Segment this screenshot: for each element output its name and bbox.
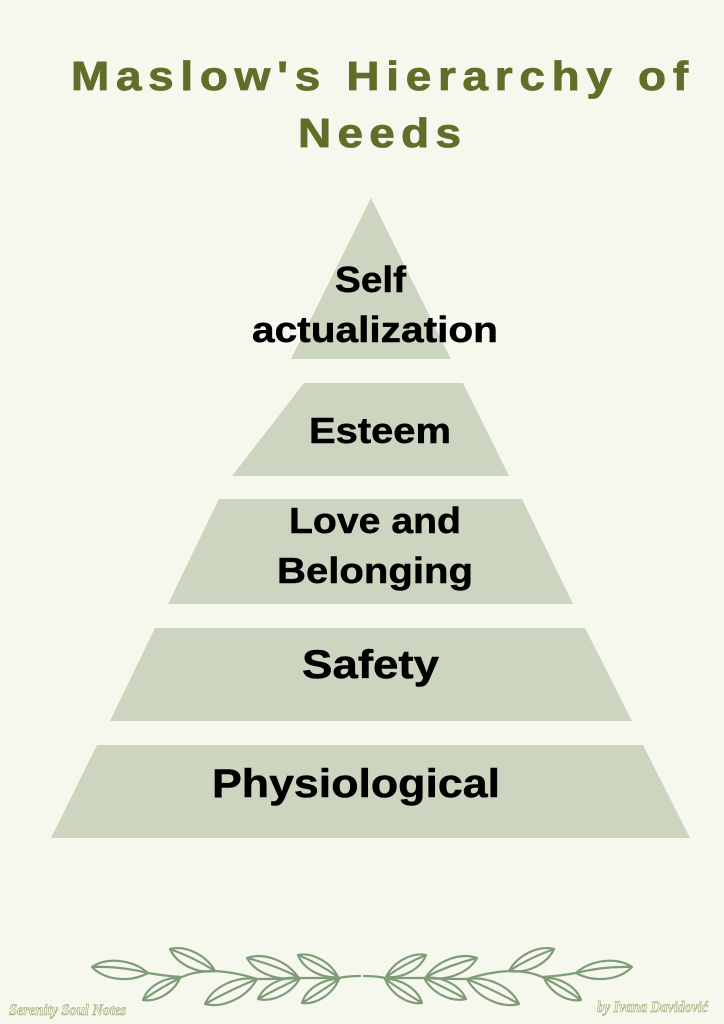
tier: esteem bbox=[232, 383, 509, 476]
icon: right leaf branch bbox=[364, 948, 632, 1005]
tier: safety bbox=[110, 628, 632, 721]
title: Needs bbox=[298, 111, 461, 156]
title bbox=[71, 54, 689, 156]
credit: brand name: Serenity Soul Notes bbox=[9, 1002, 126, 1019]
tier: love and belonging: Love and bbox=[289, 500, 461, 541]
pyramid bbox=[51, 198, 690, 838]
tier: love and belonging bbox=[168, 499, 573, 604]
tier: self actualization bbox=[252, 198, 498, 359]
tier: safety: Safety bbox=[302, 643, 440, 687]
tier: physiological: Physiological bbox=[212, 762, 500, 806]
credit: author: by Ivana Davidović bbox=[597, 999, 709, 1016]
tier: self actualization: Self bbox=[335, 259, 407, 300]
tier: self actualization: actualization bbox=[252, 309, 498, 350]
tier: physiological bbox=[51, 745, 690, 838]
title: Maslow's Hierarchy of bbox=[71, 54, 689, 99]
tier: esteem: Esteem bbox=[309, 410, 451, 451]
tier: love and belonging: Belonging bbox=[277, 550, 473, 591]
icon: left leaf branch bbox=[92, 948, 360, 1005]
